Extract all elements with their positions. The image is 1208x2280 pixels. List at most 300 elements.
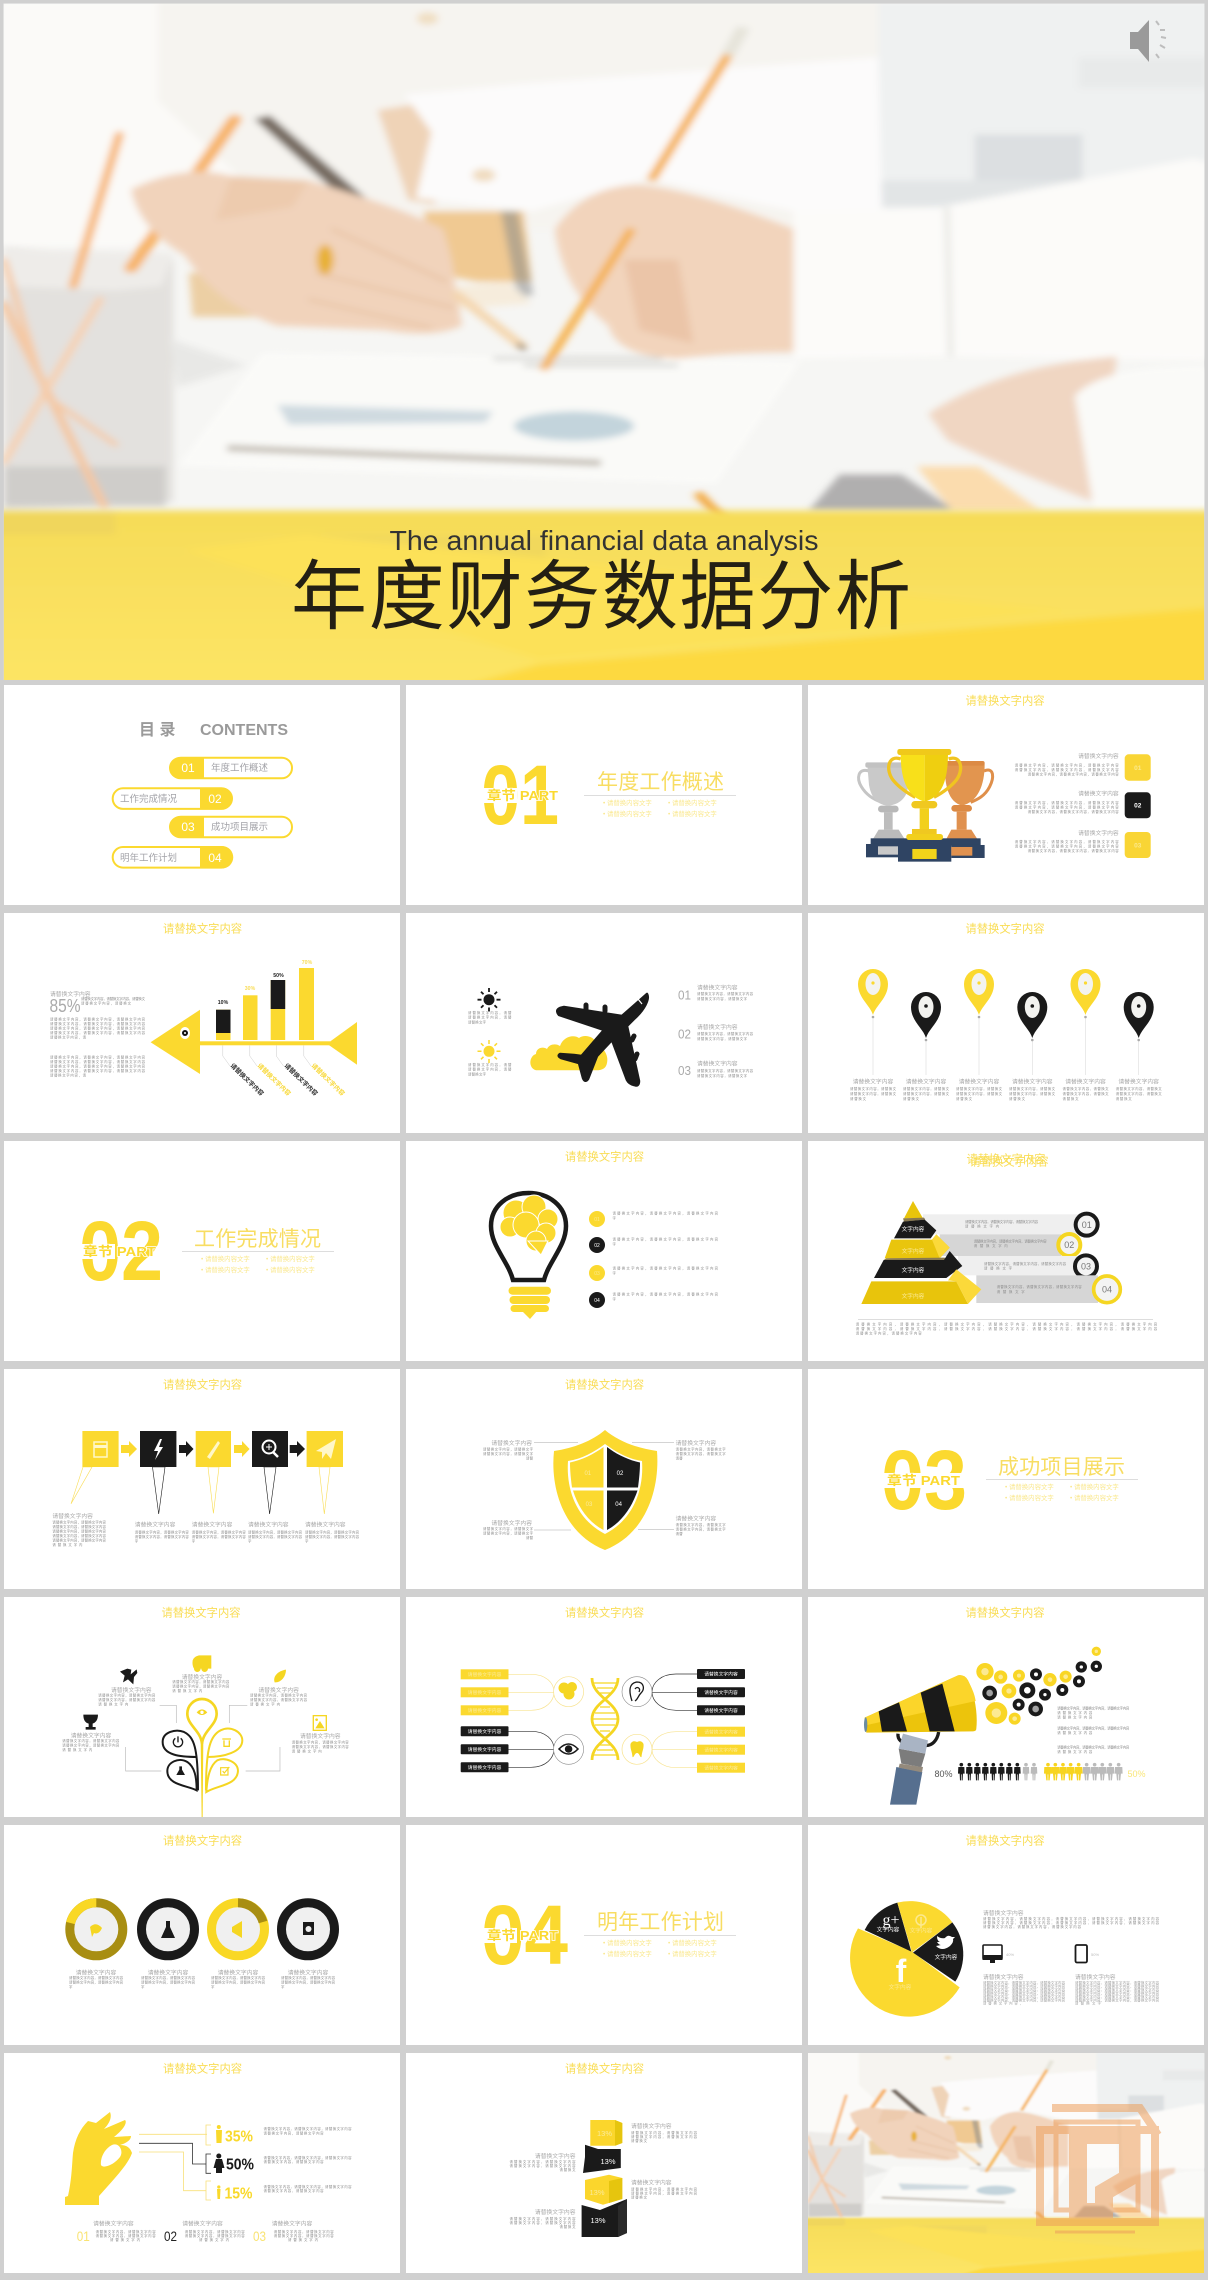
left text block 1: 请替换文字内容，请替换文字内容，请替换文字内容 (50, 1021, 146, 1026)
contents item 02: 工作完成情况 (120, 793, 178, 805)
item 03 badge: 03 (1134, 842, 1142, 850)
item 03: 请替换文字内容 (697, 1060, 738, 1068)
picture caption: 请替换文字内容，请替换文字内容 (292, 1744, 349, 1749)
item 02 badge (1125, 792, 1151, 818)
section number: 03 (881, 1433, 967, 1527)
trophy caption: 请替换文字内 (62, 1747, 93, 1752)
stat 50%: 50% (226, 2156, 254, 2174)
band text: 请替换文字内 (965, 1224, 1000, 1228)
slide title: 请替换文字内容 (565, 1150, 644, 1164)
right text: 请替换文字内容 (1057, 1714, 1093, 1720)
trophy caption (62, 1732, 120, 1752)
panel: DNA (406, 1597, 802, 1817)
top caption: 请替换文字内 (172, 1688, 203, 1693)
section number: 02 (79, 1204, 163, 1298)
plane caption: 请替换文字内容，请替换文字内容 (98, 1697, 156, 1702)
divider (986, 1478, 1138, 1480)
item 02 (678, 1023, 754, 1042)
cube text 1 (631, 2122, 698, 2143)
band text (965, 1219, 1082, 1294)
item 03 text (1015, 829, 1119, 853)
bottom item 03: 请替换文字内 (288, 2237, 319, 2242)
flow arrows (121, 1441, 305, 1457)
right yellow tags: 请替换文字内容 (704, 1764, 738, 1771)
tree diagram (126, 1699, 280, 1817)
contents item 02: 02 (208, 792, 222, 806)
callout top right: 请替换文字内容，请替换文字 (676, 1446, 726, 1452)
cloud (530, 1036, 607, 1070)
pin captions: 请替换文 (903, 1096, 920, 1101)
label band (479, 788, 517, 803)
section bullets: • 请替换内容文字 (668, 809, 717, 818)
panel: pie chart (808, 1825, 1204, 2045)
callout top left: 请替换文字内容，请替换文字 (483, 1446, 534, 1452)
section bullets: • 请替换内容文字 (603, 798, 652, 807)
pin row (858, 969, 1154, 1075)
ring captions: 请替换文字内容，请替换文字内容 (211, 1980, 266, 1984)
pin captions (850, 1078, 1162, 1101)
list text: 请替换文字内容，请替换文字内容，请替换文字内容 (612, 1292, 719, 1296)
top caption: 请替换文字内容 (182, 1673, 222, 1681)
tier labels: 文字内容 (902, 1225, 925, 1233)
stat 15%: 15% (224, 2186, 252, 2202)
section bullets: • 请替换内容文字 (668, 1938, 717, 1947)
list text (612, 1210, 719, 1302)
pin captions: 请替换文 (1062, 1096, 1079, 1101)
step 1 text (52, 1512, 107, 1547)
bottom note: 请替换文字内容，请替换文字内容，请替换文字内容，请替换文字内容，请替换文字内容，请替换文字内容，请替换文字内容 (856, 1326, 1158, 1331)
cube text 3: 请替换文字内容，请替换文字内容 (631, 2186, 698, 2192)
stat descriptions: 请替换文字内容，请替换文字内容，请替换文字内容 (264, 2184, 352, 2189)
trophy caption: 请替换文字内容，请替换文字内容 (62, 1738, 120, 1743)
people stat 50%: 50% (1128, 1769, 1146, 1779)
pin captions: 请替换文字内容 (1012, 1078, 1053, 1086)
pie sectors (850, 1901, 963, 2017)
airplane (557, 994, 648, 1086)
cube text 3: 请替换文字内容，请替换文字内容 (631, 2190, 698, 2196)
cube text 3: 请替换文 (631, 2194, 648, 2200)
ring captions: 请替换文字内容 (76, 1968, 116, 1976)
ring captions: 请替换文字内容，请替换文字内容 (281, 1980, 336, 1984)
bottom item 02: 请替换文字内容，请替换文字内容 (185, 2233, 245, 2238)
section number: 04 (481, 1888, 568, 1982)
slide title: 请替换文字内容 (163, 1834, 242, 1848)
picture caption: 请替换文字内 (292, 1748, 322, 1754)
pie labels: 文字内容 (910, 1926, 933, 1934)
step 1 text: 请替换文字内容，请替换文字内容 (52, 1524, 107, 1529)
cube text 2: 请替换文字内容，请替换文字内容 (510, 2163, 576, 2168)
slide title: 请替换文字内容 (565, 1606, 644, 1620)
bar chart: 10% (218, 1000, 229, 1006)
steps 2-5 text: 字 (248, 1539, 252, 1544)
icon: yellow sun (478, 1040, 500, 1063)
callout top right: 请替换文字内容 (676, 1439, 716, 1447)
pin captions: 请替换文字内容，请替换文 (850, 1086, 897, 1091)
list text: 请替换文字内容，请替换文字内容，请替换文字内容 (612, 1266, 719, 1270)
cube text 2: 请替换文 (560, 2167, 576, 2172)
picture caption (292, 1732, 349, 1754)
item 01 text: 请替换文字内容，请替换文字内容，请替换文字内容 (1015, 767, 1119, 772)
list text: 字 (612, 1296, 616, 1302)
steps 2-5 text: 请替换文字内容，请替换文字内容 (248, 1534, 303, 1539)
fish rib labels: 请替换文字内容 (256, 1062, 292, 1098)
left text block 1: 请替换文字内容，请 (50, 1034, 87, 1040)
slide title: 请替换文字内容 (565, 2062, 644, 2076)
left text block 1: 请替换文字内容，请替换文字内容，请替换文字内容 (50, 1030, 146, 1035)
contents item 03: 成功项目展示 (211, 821, 268, 833)
right yellow tags: 请替换文字内容 (704, 1728, 738, 1735)
bottom item 01: 请替换文字内容，请替换文字内容 (96, 2229, 156, 2234)
steps 2-5 text: 字 (135, 1539, 139, 1544)
label band (77, 1244, 115, 1259)
right text block: 请替换文字内容 (1075, 1973, 1116, 1981)
ring captions: 请替换文字内容 (148, 1968, 188, 1976)
steps 2-5 text: 请替换文字内容 (305, 1520, 346, 1528)
item 01: 请替换文字内容，请替换文字内容 (697, 991, 754, 996)
bar chart: 50% (273, 973, 284, 979)
slide title: 请替换文字内容 (161, 1606, 241, 1620)
left yellow tags: 请替换文字内容 (468, 1671, 502, 1678)
bottom item 01: 请替换文字内 (110, 2237, 141, 2242)
bottom item 02 (164, 2220, 245, 2244)
item 03 text: 请替换文字内容，请替换文字内容，请替换文字内容 (1015, 844, 1119, 848)
steps 2-5 text: 请替换文字内容 (248, 1520, 289, 1528)
top text block: 请替换文字内容，请替换文字内容，请替换文字内容 (983, 1924, 1082, 1929)
pin captions: 请替换文 (1116, 1096, 1132, 1101)
panel: map pins (808, 913, 1204, 1133)
steps 2-5 text: 请替换文字内容，请替换文字内容 (135, 1534, 189, 1539)
bottom item 01: 01 (77, 2229, 90, 2244)
panel: stacked cubes (406, 2053, 802, 2273)
pin captions: 请替换文字内容，请替换文 (1116, 1091, 1162, 1096)
callout top left (483, 1439, 534, 1460)
ring captions: 字 (141, 1984, 145, 1989)
subtitle: The annual financial data analysis (390, 525, 818, 556)
stat 35% (216, 2125, 253, 2146)
right black tags: 请替换文字内容 (704, 1707, 738, 1714)
pin captions: 请替换文字内容，请替换文 (1062, 1091, 1109, 1096)
section bullets: • 请替换内容文字 (1005, 1482, 1054, 1491)
item 03 badge (1125, 832, 1151, 858)
bottom item 03: 请替换文字内容 (272, 2220, 312, 2228)
pin captions: 请替换文字内容，请替换文 (903, 1086, 950, 1091)
bottom note (856, 1319, 1158, 1336)
contents item 04: 明年工作计划 (120, 852, 177, 864)
section number: 01 (481, 748, 559, 842)
right text block: 请替换文字 (1075, 2000, 1102, 2006)
tier labels: 文字内容 (902, 1292, 925, 1300)
list dots: 03 (594, 1271, 600, 1277)
steps 2-5 text: 请替换文字内容，请替换文字内容 (192, 1530, 246, 1534)
panel: closing photo (802, 2052, 1208, 2278)
people stat 80%: 80% (934, 1769, 953, 1779)
bottom item 02: 02 (164, 2229, 177, 2244)
left text block: 请替换文字内容， (983, 2000, 1023, 2006)
fish rib labels: 请替换文字内容 (229, 1062, 265, 1098)
left text block: 请替换文字内容，请替换文字内容，请替换文字内容 (983, 1984, 1066, 1988)
text under black sun (468, 1010, 512, 1024)
label band (479, 1928, 517, 1943)
pin captions: 请替换文字内容，请替换文 (903, 1091, 950, 1096)
stat descriptions: 请替换文字内容，请替换文字内容 (264, 2188, 324, 2193)
band text: 请替换文字 (997, 1289, 1025, 1294)
top text block: 请替换文字内容，请替换文字内容，请替换文字内容，请替换文字内容，请替换文字内容 (983, 1916, 1160, 1921)
right yellow tags (697, 1727, 745, 1773)
85% stat (50, 990, 146, 1016)
bottom item 01: 请替换文字内容 (93, 2220, 134, 2228)
contents item 03 (169, 816, 292, 838)
callout bottom right: 请替 (676, 1531, 683, 1536)
ring captions: 请替换文字内容，请替换文字内容 (281, 1975, 336, 1980)
text under yellow sun: 请替换文字 (468, 1071, 487, 1076)
right text block: 请替换文字内容，请替换文字内容，请替换文字内容 (1075, 1984, 1160, 1988)
right text block: 请替换文字内容，请替换文字内容，请替换文字内容 (1075, 1980, 1160, 1985)
pin captions: 请替换文 (956, 1096, 973, 1101)
stat 50% (214, 2154, 254, 2174)
plane caption: 请替换文字内 (98, 1702, 129, 1706)
cube 4 (582, 2199, 627, 2237)
85% stat: 85% (50, 996, 80, 1016)
pin captions: 请替换文字内容，请替换文 (850, 1091, 897, 1096)
item 02: 请替换文字内容，请替换文字 (697, 1036, 748, 1041)
icon: monitor (982, 1945, 1014, 1963)
ring captions: 请替换文字内容，请替换文字内容 (141, 1975, 196, 1980)
left text block: 请替换文字内容，请替换文字内容，请替换文字内容 (983, 1987, 1066, 1992)
ring captions: 请替换文字内容，请替换文字内容 (211, 1975, 266, 1980)
item 02 text: 请替换文字内容，请替换文字内容，请替换文字内容 (1015, 800, 1119, 805)
ring captions: 字 (281, 1984, 285, 1989)
picture caption: 请替换文字内容，请替换文字内容 (292, 1740, 349, 1744)
left text block 2: 请替换文字内容，请替换文字内容，请替换文字内容 (50, 1054, 146, 1060)
text under black sun: 请替换文字内容，请替 (468, 1010, 512, 1015)
panel: megaphone (808, 1597, 1204, 1817)
panel: trophies (808, 685, 1204, 905)
callout top left: 请替 (526, 1456, 534, 1460)
ring captions (69, 1968, 336, 1989)
text under yellow sun: 请替换文字内容，请替 (468, 1067, 512, 1072)
list text: 请替换文字内容，请替换文字内容，请替换文字内容 (612, 1210, 719, 1216)
picture caption: 请替换文字内容 (300, 1732, 341, 1740)
contents item 01: 年度工作概述 (211, 762, 269, 774)
pie labels: f (896, 1953, 907, 1989)
icon: eye circle (554, 1734, 584, 1764)
tier labels: 文字内容 (902, 1247, 925, 1255)
section bullets: • 请替换内容文字 (201, 1265, 250, 1274)
ring captions: 字 (69, 1984, 73, 1989)
section bullets: • 请替换内容文字 (603, 1949, 652, 1958)
stat descriptions (264, 2126, 352, 2193)
section bullets: • 请替换内容文字 (603, 1938, 652, 1947)
callout top right: 请替 (676, 1456, 683, 1460)
step 1 text: 请替换文字内容，请替换文字内容 (52, 1529, 107, 1534)
callout bottom left (483, 1519, 534, 1540)
item 02 badge: 02 (1134, 803, 1142, 810)
closing photo (802, 2052, 1208, 2278)
bottom item 02: 请替换文字内 (199, 2237, 230, 2242)
item 03: 请替换文字内容，请替换文字内容 (697, 1068, 754, 1073)
band text: 请替换文字内 (974, 1243, 1008, 1248)
panel: section 03 (808, 1369, 1204, 1589)
item 01: 请替换文字内容，请替换文字 (697, 996, 748, 1001)
cube 4: 13% (590, 2216, 606, 2225)
right text block: 请替换文字内容，请替换文字内容，请替换文字内容 (1075, 1994, 1160, 1999)
top caption: 请替换文字内容，请替换文字内容 (172, 1679, 230, 1684)
left black tags: 请替换文字内容 (468, 1728, 502, 1735)
ring captions: 请替换文字内容，请替换文字内容 (141, 1980, 196, 1984)
fish rib labels: 请替换文字内容 (310, 1062, 346, 1098)
left text block: 请替换文字内容，请替换文字内容，请替换文字内容 (983, 1980, 1066, 1985)
icon: brain circle (554, 1677, 584, 1707)
cube text 4: 请替换文字内容，请替换文字内容 (510, 2216, 576, 2221)
top text block: 请替换文字内容 (983, 1909, 1024, 1917)
pie labels: g+ (882, 1912, 900, 1929)
bottom item 03: 请替换文字内容，请替换文字内容 (274, 2229, 334, 2234)
panel: section 02 (4, 1141, 400, 1361)
callout bottom right (676, 1514, 726, 1536)
panel: light bulb (406, 1141, 802, 1361)
slide title doubled: 请替换文字内容 (969, 1154, 1049, 1168)
tier labels: 文字内容 (902, 1266, 925, 1274)
right text block (1075, 1973, 1160, 2006)
item 01: 01 (678, 988, 691, 1002)
item 01: 请替换文字内容 (697, 984, 738, 992)
list text: 字 (612, 1242, 616, 1246)
left text block 1: 请替换文字内容，请替换文字内容，请替换文字内容 (50, 1016, 146, 1022)
cube text 2: 请替换文字内容，请替换文字内容 (510, 2159, 576, 2164)
pin captions: 请替换文 (1009, 1096, 1026, 1101)
step 1 text: 请替换文字内容，请替换文字内容 (52, 1538, 107, 1543)
section bullets (603, 798, 717, 818)
right text block: 请替换文字内容，请替换文字内容，请替换文字内容 (1075, 1998, 1160, 2002)
bottom item 02: 请替换文字内容，请替换文字内容 (185, 2229, 245, 2234)
item 01 text (1015, 752, 1119, 776)
contents item 04 (113, 846, 233, 868)
hand silhouette (65, 2112, 132, 2205)
label band (879, 1473, 969, 1488)
pin captions: 请替换文字内容 (1065, 1078, 1106, 1086)
left text block 1: 请替换文字内容，请替换文字内容，请替换文字内容 (50, 1026, 146, 1030)
section bullets: • 请替换内容文字 (1070, 1493, 1119, 1502)
slide title: 请替换文字内容 (163, 922, 242, 936)
slide title: 请替换文字内容 (965, 1606, 1045, 1620)
callout top right (676, 1439, 726, 1460)
85% stat: 请替换文字内容，请替换文字内容，请替换文 (81, 996, 146, 1001)
left text block: 请替换文字内容，请替换文字内容，请替换文字内容 (983, 1998, 1066, 2002)
bottom item 01 (77, 2220, 156, 2244)
left yellow tags (461, 1669, 508, 1715)
slide title: 请替换文字内容 (565, 1378, 644, 1392)
panel: fish chart (4, 913, 400, 1133)
section heading: 明年工作计划 (597, 1911, 724, 1934)
callout bottom left: 请替换文字内容，请替换文字 (483, 1530, 534, 1536)
cube text 3 (631, 2178, 698, 2200)
steps 2-5 text: 请替换文字内容，请替换文字内容 (135, 1530, 189, 1534)
steps 2-5 text: 字 (305, 1539, 309, 1544)
section bullets: • 请替换内容文字 (668, 798, 717, 807)
cube text 1: 请替换文字内容 (631, 2122, 672, 2130)
message bubbles (976, 1647, 1102, 1725)
cube text 1: 请替换文字内容，请替换文字内容 (631, 2130, 698, 2135)
trophy caption: 请替换文字内容 (71, 1732, 111, 1740)
list dots: 04 (594, 1298, 600, 1304)
fish rib labels: 请替换文字内容 (283, 1062, 319, 1098)
left text block 2 (50, 1054, 146, 1078)
cube text 3: 请替换文字内容 (631, 2178, 672, 2186)
callout bottom left: 请替换文字内容，请替换文字 (483, 1526, 534, 1531)
slide title: 请替换文字内容 (965, 694, 1045, 708)
left text block 2: 请替换文字内容，请 (50, 1072, 87, 1078)
steps 2-5 text (135, 1520, 360, 1544)
people stat 80% (934, 1763, 1037, 1780)
ring captions: 请替换文字内容，请替换文字内容 (69, 1980, 124, 1984)
left yellow tags: 请替换文字内容 (468, 1707, 502, 1714)
list text: 请替换文字内容，请替换文字内容，请替换文字内容 (612, 1236, 719, 1242)
pin captions: 请替换文字内容 (906, 1078, 946, 1086)
steps 2-5 text: 字 (192, 1539, 196, 1544)
right text: 请替换文字内容 (1057, 1749, 1093, 1754)
callout top left: 请替换文字内容 (491, 1439, 532, 1447)
callout bottom left: 请替 (526, 1535, 534, 1540)
panel: section 04 (406, 1825, 802, 2045)
left text block 2: 请替换文字内容，请替换文字内容，请替换文字内容 (50, 1068, 146, 1073)
connector lines (139, 2125, 211, 2200)
section heading: 工作完成情况 (194, 1228, 321, 1251)
bottom item 02: 请替换文字内容 (182, 2220, 223, 2228)
panel: hand (4, 2053, 400, 2273)
plane caption (98, 1686, 156, 1706)
pin captions: 请替换文字内容，请替换文 (1116, 1086, 1162, 1091)
item 02: 02 (678, 1028, 691, 1042)
cube text 1: 请替换文 (631, 2138, 648, 2143)
pin captions: 请替换文字内容，请替换文 (956, 1091, 1003, 1096)
band text: 请替换文字内容，请替换文字内容，请替换文字内容 (984, 1261, 1067, 1266)
icon: black sun (478, 988, 500, 1012)
cube text 1: 请替换文字内容，请替换文字内容 (631, 2134, 698, 2139)
pie labels: 文字内容 (877, 1926, 900, 1934)
ring captions: 请替换文字内容 (218, 1968, 258, 1976)
watermark logo (1040, 2108, 1158, 2232)
right text: 请替换文字内容，请替换文字内容，请替换文字内容 (1057, 1726, 1130, 1730)
pie labels: 文字内容 (935, 1953, 958, 1961)
callout bottom left: 请替换文字内容 (491, 1519, 532, 1527)
band text: 请替换文字内容，请替换文字内容，请替换文字内容 (965, 1219, 1039, 1224)
stat descriptions: 请替换文字内容，请替换文字内容 (264, 2159, 324, 2164)
text under yellow sun (468, 1062, 512, 1076)
bottom item 03: 03 (253, 2229, 266, 2244)
callout bottom right: 请替换文字内容，请替换文字 (676, 1522, 726, 1527)
steps 2-5 text: 请替换文字内容，请替换文字内容 (305, 1534, 360, 1539)
stat descriptions: 请替换文字内容，请替换文字内容，请替换文字内容 (264, 2155, 352, 2160)
ring 1 (70, 1903, 123, 1956)
shield: 02 (617, 1471, 624, 1477)
cube 2: 13% (600, 2157, 616, 2166)
plane caption: 请替换文字内容，请替换文字内容 (98, 1692, 156, 1698)
icons row (83, 1655, 326, 1730)
bottom item 03 (253, 2220, 334, 2244)
contents item 01: 01 (181, 761, 195, 775)
top text block: 请替换文字内容，请替换文字内容，请替换文字内容，请替换文字内容，请替换文字内容 (983, 1920, 1160, 1925)
slide title: 请替换文字内容 (965, 922, 1045, 936)
ring 2 (142, 1903, 194, 1956)
bar chart: 30% (245, 986, 256, 992)
text under black sun: 请替换文字 (468, 1019, 487, 1024)
step 1 text: 请替换文字内容 (52, 1512, 93, 1520)
stat descriptions: 请替换文字内容，请替换文字内容 (264, 2130, 324, 2136)
left text block 1 (50, 1016, 146, 1040)
panel: hero cover (0, 0, 1208, 695)
steps 2-5 text: 请替换文字内容，请替换文字内容 (305, 1530, 360, 1534)
cube text 4 (510, 2208, 576, 2229)
